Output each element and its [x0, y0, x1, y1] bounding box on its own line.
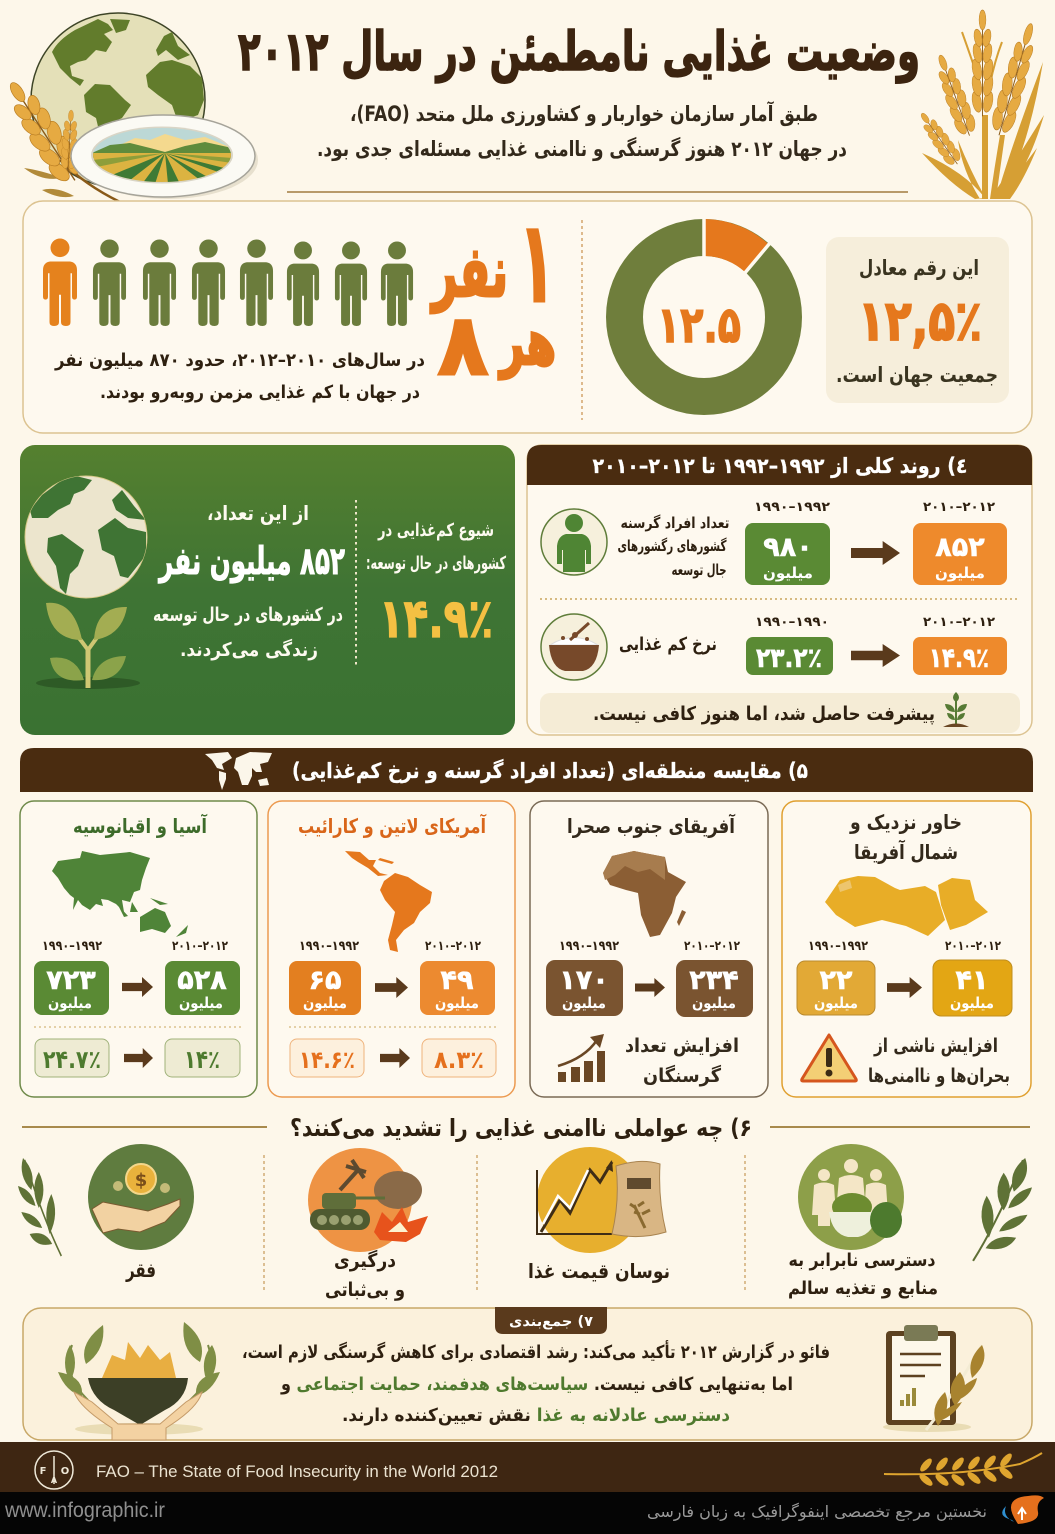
row: undernourishment values: ۲۳.۲٪: [756, 643, 822, 674]
icon: rising bars: [558, 1034, 605, 1082]
paragraph: در سال‌های ۲۰۱۰–۲۰۱۲، حدود ۸۷۰ میلیون نفر: [54, 350, 425, 371]
paragraph: [242, 1340, 830, 1426]
row label: hungry people: [618, 514, 730, 579]
icon: world map: [205, 752, 272, 790]
heading: آفریقای جنوب صحرا: [567, 813, 736, 838]
row: undernourishment values: ۱۹۹۰–۱۹۹۰: [755, 615, 829, 630]
text: of this number: از این تعداد،: [207, 501, 309, 525]
people icons: [43, 238, 413, 326]
heading: آمریکای لاتین و کارائیب: [298, 813, 487, 838]
big text: 1 in 8: ۸: [438, 296, 488, 394]
map: Latin America: [345, 851, 432, 952]
values: ۲۳۴: [689, 965, 739, 996]
icon: left sprig: [18, 1158, 61, 1256]
heading: خاور نزدیک و: [849, 810, 962, 834]
values: ۱۹۹۰–۱۹۹۲: [808, 939, 868, 954]
factor: conflict: درگیری: [334, 1249, 396, 1272]
stat box: جمعیت جهان است.: [836, 363, 998, 387]
panel: Near East and North Africa: [782, 801, 1031, 1097]
footer: source band: [0, 1442, 1055, 1492]
panel: overall trend: [527, 445, 1032, 735]
text: of this number: زندگی می‌کردند.: [180, 638, 318, 661]
row label: hungry people: تعداد افراد گرسنه: [620, 514, 730, 532]
row: hungry people values: میلیون: [763, 564, 813, 582]
values: ۷۲۳: [46, 965, 96, 996]
values: [34, 939, 241, 1077]
row: hungry people values: ۹۸۰: [763, 532, 813, 563]
values: ۱۴.۶٪: [299, 1046, 355, 1074]
callout: progress: پیشرفت حاصل شد، اما هنوز کافی نیست.: [593, 703, 935, 725]
icon: bowl in circle: [541, 614, 607, 680]
factor: poverty: [88, 1144, 194, 1282]
values: میلیون: [562, 994, 606, 1012]
row: undernourishment values: ۱۴.۹٪: [929, 643, 989, 674]
factor: unequal access: [788, 1144, 938, 1299]
tab: summary: ۷) جمع‌بندی: [509, 1314, 593, 1330]
icon: hands and bowl: [58, 1322, 220, 1440]
panel: one in eight: [23, 198, 1032, 433]
text: prevalence: شیوع کم‌غذایی در: [377, 520, 494, 541]
note: rising hungry: گرسنگان: [643, 1064, 722, 1087]
icon: wheat: [884, 1452, 1042, 1488]
panel: Sub-Saharan Africa: [530, 801, 768, 1097]
paragraph: فائو در گزارش ۲۰۱۲ تأکید می‌کند: رشد اقتصادی برای کاهش گرسنگی لازم است،: [242, 1340, 830, 1363]
values: ۴۱: [956, 965, 988, 996]
stat box: [826, 237, 1009, 403]
text: of this number: ۸۵۲ میلیون نفر: [158, 539, 345, 583]
big text: 1 in 8: ۱: [519, 198, 555, 328]
values: ۲۰۱۰–۲۰۱۲: [425, 939, 481, 954]
donut chart: ۱۲.۵: [657, 296, 741, 354]
paragraph: دسترسی عادلانه به غذا نقش تعیین‌کننده دارند.: [342, 1405, 730, 1426]
factor: poverty: $: [135, 1170, 147, 1191]
subtitle: [317, 101, 847, 161]
icon: warning: [802, 1035, 856, 1081]
heading: شمال آفریقا: [854, 839, 958, 864]
big text: 1 in 8: هر: [498, 306, 556, 379]
factor: food price volatility: [528, 1147, 670, 1283]
values: میلیون: [814, 994, 858, 1012]
callout: progress: [540, 692, 1020, 733]
values: ۲۰۱۰–۲۰۱۲: [172, 939, 228, 954]
row: hungry people values: ۸۵۲: [935, 532, 985, 563]
subtitle: طبق آمار سازمان خواربار و کشاورزی ملل متحد (FAO)،: [350, 101, 818, 126]
big text: 1 in 8: نفر: [430, 231, 508, 313]
factor: unequal access: منابع و تغذیه سالم: [788, 1278, 938, 1299]
row: hungry people values: میلیون: [935, 564, 985, 582]
values: ۱۹۹۰–۱۹۹۲: [299, 939, 359, 954]
row: hungry people values: [745, 500, 1007, 585]
values: ۱۷۰: [559, 965, 609, 996]
values: میلیون: [48, 994, 92, 1012]
section heading: aggravating factors: ۶) چه عواملی ناامنی غذایی را تشدید می‌کنند؟: [290, 1114, 752, 1142]
icon: FAO logo: O: [61, 1466, 69, 1477]
note: rising hungry: افزایش تعداد: [625, 1035, 739, 1057]
publisher url: www.infographic.ir: [4, 1499, 165, 1522]
values: میلیون: [950, 994, 994, 1012]
text: of this number: در کشورهای در حال توسعه: [153, 604, 343, 626]
values: میلیون: [179, 994, 223, 1012]
values: ۲۰۱۰–۲۰۱۲: [684, 939, 740, 954]
text: of this number: [153, 501, 345, 661]
row label: hungry people: جال توسعه: [672, 561, 726, 579]
values: میلیون: [303, 994, 347, 1012]
heading: آسیا و اقیانوسیه: [73, 813, 208, 838]
panel: Latin America and Caribbean: [268, 801, 515, 1097]
paragraph: اما به‌تنهایی کافی نیست. سیاست‌های هدفمند، حمایت اجتماعی و: [280, 1374, 793, 1395]
row: hungry people values: ۲۰۱۰–۲۰۱۲: [923, 500, 995, 515]
subtitle: در جهان ۲۰۱۲ هنوز گرسنگی و ناامنی غذایی مسئله‌ای جدی بود.: [317, 136, 847, 161]
panel: Asia and Oceania: [20, 801, 257, 1097]
heading: [849, 810, 962, 864]
section heading: regional comparison: [20, 748, 1033, 792]
row: undernourishment values: [746, 615, 1007, 675]
section heading: regional comparison: ۵) مقایسه منطقه‌ای (تعداد افراد گرسنه و نرخ کم‌غذایی): [292, 758, 808, 783]
illustration: right wheat bunch: [914, 10, 1044, 199]
values: ۲۰۱۰–۲۰۱۲: [945, 939, 1001, 954]
panel: conclusion: [23, 1307, 1032, 1440]
text: prevalence: ۱۴.۹٪: [379, 587, 493, 650]
factor: unequal access: دسترسی نابرابر به: [788, 1250, 936, 1271]
row label: undernourishment: نرخ کم غذایی: [619, 634, 717, 655]
panel: developing countries: [20, 445, 515, 735]
text: prevalence: [366, 520, 506, 650]
icon: clipboard and wheat: [883, 1325, 984, 1432]
icon: right sprig: [973, 1158, 1032, 1261]
icon: globe: [25, 476, 147, 598]
illustration: plate with farm fields: [71, 115, 258, 199]
factor: poverty: فقر: [125, 1258, 156, 1282]
map: Africa: [603, 851, 686, 937]
illustration: left wheat ear: [0, 73, 120, 202]
stat box: ۱۲,۵٪: [858, 289, 982, 354]
note: crises: [868, 1035, 1010, 1087]
values: ۱۴٪: [184, 1045, 220, 1074]
footer: publisher band: [0, 1492, 1055, 1534]
icon: person in circle: [541, 509, 607, 575]
icon: FAO logo: A: [51, 1476, 58, 1485]
values: [546, 939, 753, 1017]
values: میلیون: [435, 994, 479, 1012]
values: ۶۵: [309, 965, 341, 996]
note: rising hungry: [625, 1035, 739, 1087]
map: MENA: [825, 876, 988, 936]
values: میلیون: [692, 994, 736, 1012]
factor: food price volatility: نوسان قیمت غذا: [528, 1259, 670, 1283]
note: crises: افزایش ناشی از: [873, 1035, 998, 1057]
map: Asia: [52, 851, 188, 937]
row: hungry people values: ۱۹۹۰–۱۹۹۲: [754, 500, 830, 515]
paragraph: [54, 350, 425, 403]
values: ۲۲: [820, 965, 853, 996]
source text: FAO – The State of Food Insecurity in the World 2012: [96, 1462, 498, 1481]
values: [289, 939, 496, 1077]
heading: trend: ٤) روند کلی از ۱۹۹۲–۱۹۹۲ تا ۲۰۱۲–۲۰۱۰: [592, 454, 968, 478]
values: ۴۹: [441, 965, 473, 996]
values: ۸.۳٪: [434, 1046, 484, 1074]
note: crises: بحران‌ها و ناامنی‌ها: [868, 1065, 1010, 1087]
values: ۵۲۸: [177, 965, 227, 996]
heading: trend: [527, 445, 1032, 485]
row label: hungry people: گشورهای رگشورهای: [618, 537, 727, 555]
values: ۱۹۹۰–۱۹۹۲: [42, 939, 102, 954]
icon: plant: [36, 603, 140, 689]
stat box: این رقم معادل: [859, 256, 979, 280]
values: ۱۹۹۰–۱۹۹۲: [559, 939, 619, 954]
text: prevalence: کشورهای در حال توسعه:: [366, 553, 506, 574]
values: [797, 939, 1012, 1016]
big text: 1 in 8: [430, 198, 556, 394]
factor: conflict: و بی‌ثباتی: [325, 1279, 405, 1301]
publisher tagline: نخستین مرجع تخصصی اینفوگرافیک به زبان فارسی: [647, 1502, 987, 1522]
row: undernourishment values: ۲۰۱۰–۲۰۱۲: [923, 615, 995, 630]
donut chart: [624, 217, 784, 396]
paragraph: در جهان با کم غذایی مزمن روبه‌رو بودند.: [100, 382, 420, 403]
icon: FAO logo: F: [40, 1466, 46, 1477]
illustration: globe: [31, 13, 205, 187]
factor: conflict: [308, 1148, 428, 1301]
icon: FAO logo: [35, 1451, 73, 1489]
tab: summary: [495, 1307, 607, 1334]
values: ۲۴.۷٪: [43, 1045, 101, 1074]
icon: publisher logo: [1002, 1495, 1044, 1524]
